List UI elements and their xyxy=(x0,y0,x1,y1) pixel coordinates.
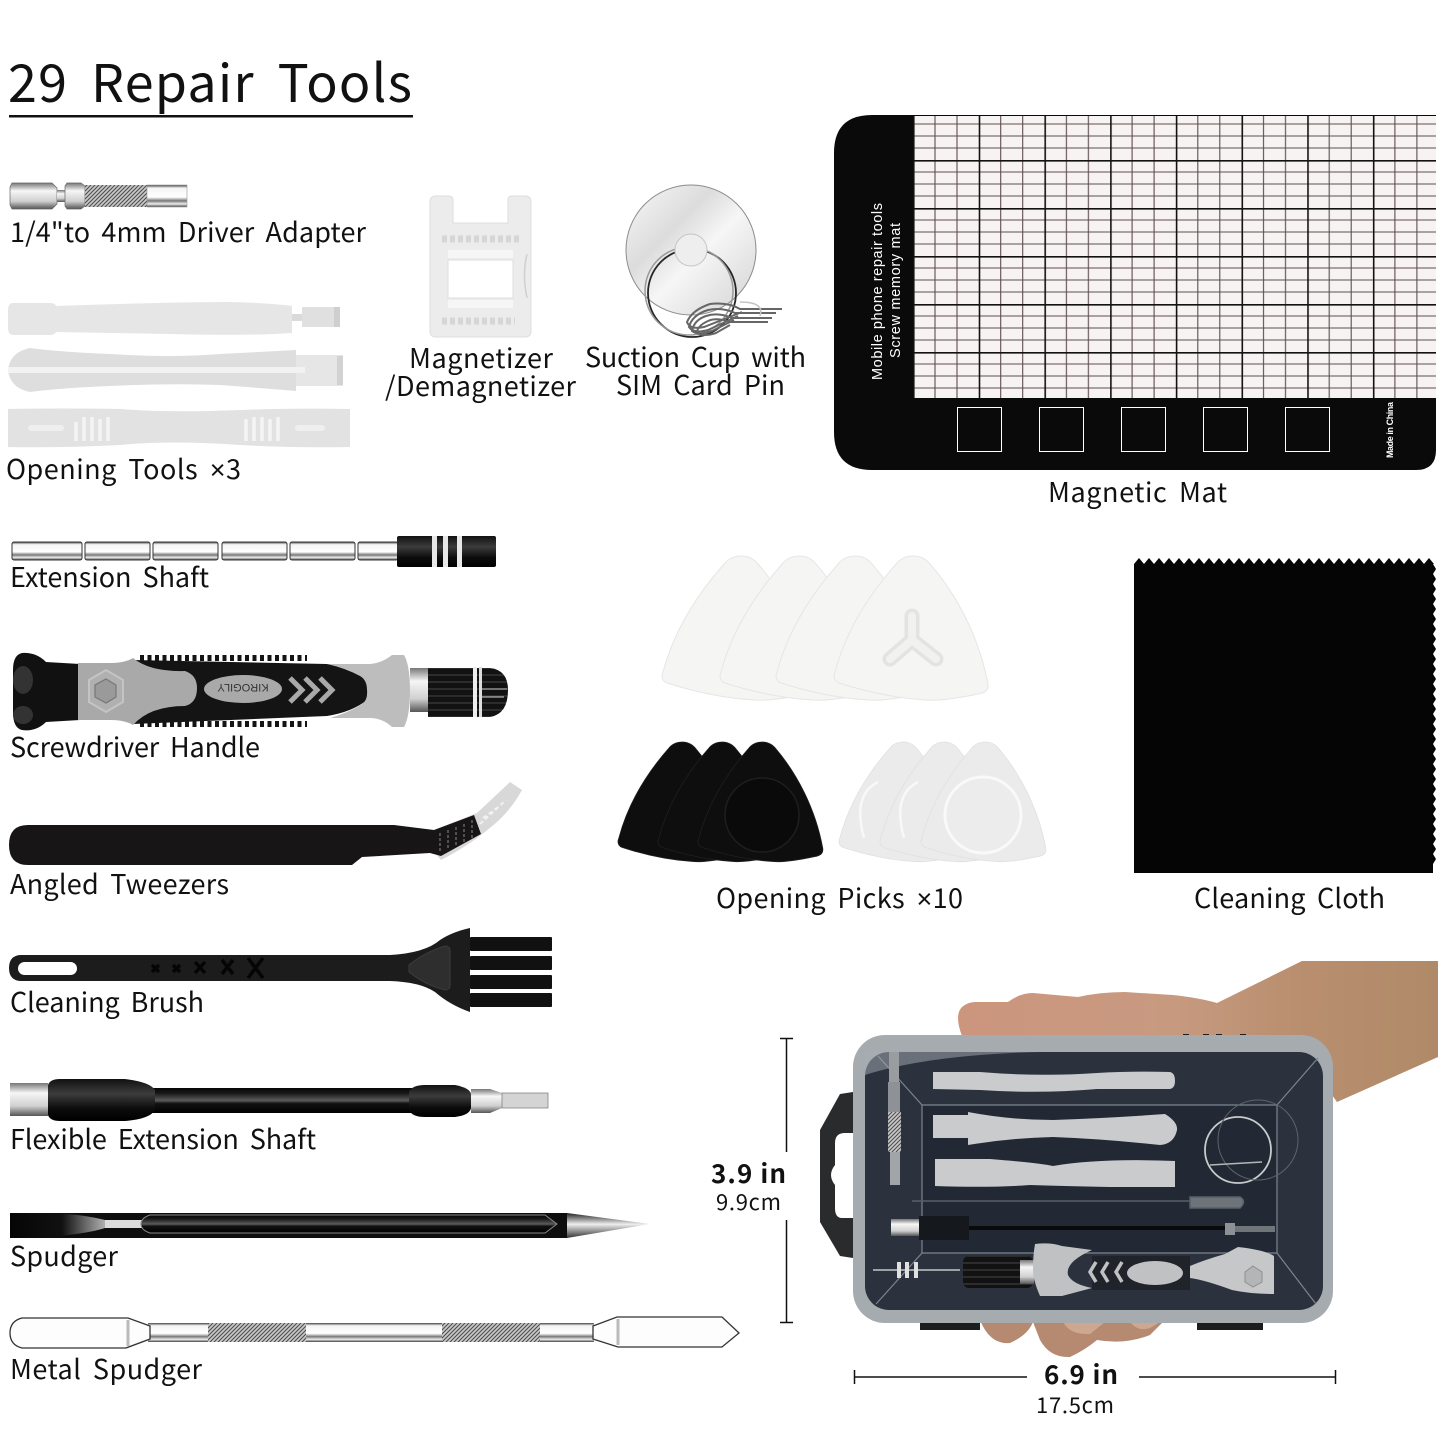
item: cleaning brush xyxy=(9,928,552,1020)
icon: handle: KIROGILY xyxy=(217,681,269,693)
tweezers xyxy=(912,1197,1244,1208)
height value centimetres: 9.9cm xyxy=(716,1185,781,1217)
opening tools xyxy=(933,1072,1177,1187)
title: 29 Repair Tools xyxy=(8,42,412,117)
width value inches: 6.9 in xyxy=(1044,1355,1118,1392)
label: Opening Picks ×10 xyxy=(716,877,963,916)
width line xyxy=(854,1370,1336,1384)
mat text: Mobile phone repair tools xyxy=(870,203,886,380)
flexible shaft xyxy=(891,1216,1275,1240)
item: opening picks xyxy=(618,556,1046,916)
adapter xyxy=(888,1052,901,1185)
label: Suction Cup with xyxy=(585,336,806,375)
label: Cleaning Cloth xyxy=(1194,877,1385,916)
dimension: width xyxy=(854,1355,1336,1420)
label: 1/4"to 4mm Driver Adapter xyxy=(10,211,367,250)
icon: cloth xyxy=(1134,558,1436,873)
case latches xyxy=(920,1034,1263,1330)
label: Flexible Extension Shaft xyxy=(10,1118,316,1157)
icon: spudger xyxy=(10,1213,650,1238)
product photo: hand holding case xyxy=(820,961,1438,1357)
label: Screwdriver Handle xyxy=(10,726,260,765)
tools inside case xyxy=(873,1052,1298,1296)
item: cleaning cloth xyxy=(1134,558,1436,916)
width value centimetres: 17.5cm xyxy=(1036,1388,1114,1420)
item: magnetizer: /Demagnetizer xyxy=(385,365,577,404)
item: flexible extension shaft xyxy=(10,1079,548,1157)
icon: flexible shaft xyxy=(10,1079,548,1121)
icon: black picks xyxy=(618,742,823,862)
item: angled tweezers xyxy=(9,782,522,902)
icon: adapter bit xyxy=(10,183,187,209)
icon: large white picks xyxy=(662,556,988,700)
icon: clear picks xyxy=(839,742,1046,862)
dimension: height xyxy=(711,1038,793,1323)
item: magnetizer xyxy=(385,196,577,404)
icon: magnetizer block xyxy=(430,196,531,337)
item: screwdriver handle xyxy=(10,653,508,765)
height line xyxy=(780,1038,793,1323)
item: suction cup: SIM Card Pin xyxy=(616,364,785,403)
icon: metal spudger xyxy=(10,1317,739,1348)
item: magnetic mat xyxy=(834,115,1436,510)
grid area xyxy=(913,116,1436,398)
label: Magnetic Mat xyxy=(1048,471,1227,510)
hand xyxy=(958,961,1438,1357)
mat text: Made in China xyxy=(1385,401,1395,458)
icon: suction cup and SIM pins xyxy=(626,185,782,337)
ring and suction cup xyxy=(1205,1100,1298,1183)
label: Extension Shaft xyxy=(10,556,209,595)
item: driver adapter xyxy=(10,183,367,250)
icon: shaft xyxy=(12,536,496,567)
screwdriver xyxy=(873,1243,1274,1296)
mat text xyxy=(870,203,1395,458)
item: spudger xyxy=(10,1213,650,1274)
label: Angled Tweezers xyxy=(10,863,229,902)
item: extension shaft xyxy=(10,536,496,595)
label: Cleaning Brush xyxy=(10,981,204,1020)
case interior xyxy=(865,1051,1323,1310)
icon: tweezers xyxy=(9,782,522,865)
label: Magnetizer xyxy=(409,337,554,376)
mat text: Screw memory mat xyxy=(888,223,904,358)
icon: opening tool 1 xyxy=(8,302,340,335)
label: Metal Spudger xyxy=(10,1348,203,1387)
icon: handle xyxy=(13,653,508,730)
item: metal spudger xyxy=(10,1317,739,1387)
icon: opening tool 3 xyxy=(8,408,350,447)
case body xyxy=(853,1035,1333,1323)
item: suction cup xyxy=(585,185,806,403)
case hang tab xyxy=(820,1092,853,1258)
icon: opening tool 2 xyxy=(8,348,343,392)
screw squares xyxy=(958,408,1330,452)
icon: brush xyxy=(9,928,552,1012)
label: Opening Tools ×3 xyxy=(6,448,241,487)
label: Spudger xyxy=(10,1235,119,1274)
panel: mat body xyxy=(834,115,1436,470)
item: opening tools xyxy=(6,302,350,487)
height value inches: 3.9 in xyxy=(711,1154,786,1191)
